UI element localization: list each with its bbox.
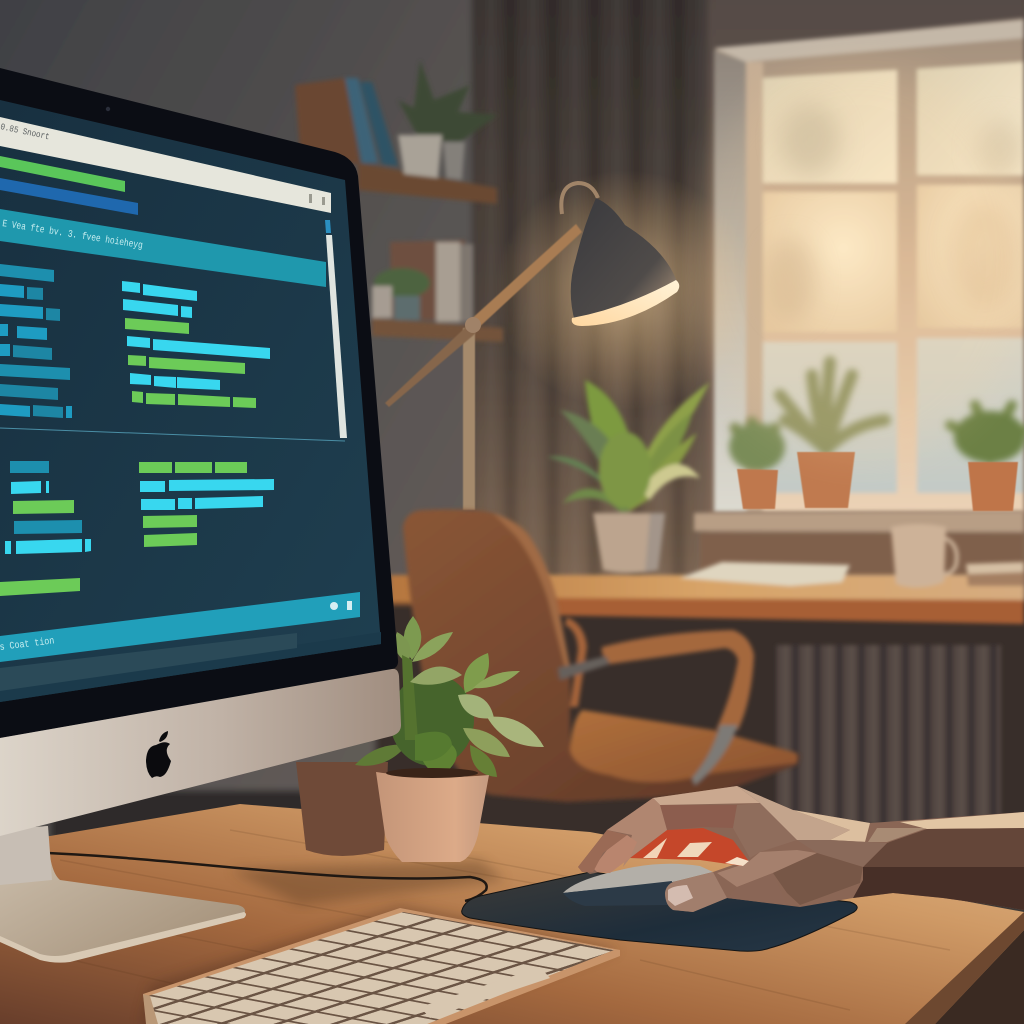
monitor stand bbox=[0, 826, 246, 963]
icon: apple logo bbox=[146, 731, 171, 778]
desk plant pot bbox=[376, 772, 489, 862]
lamp shade bbox=[571, 198, 678, 322]
status band bbox=[0, 592, 360, 662]
window plant pots bbox=[737, 452, 1018, 511]
code block lower right bbox=[139, 462, 274, 547]
heading band bbox=[0, 209, 326, 287]
code block middle bbox=[122, 281, 270, 408]
mug bbox=[891, 524, 946, 588]
radiator bbox=[776, 645, 1001, 825]
code block lower left bbox=[0, 461, 91, 596]
arm and palm base bbox=[578, 786, 1024, 912]
armrest bbox=[602, 630, 754, 730]
mouse pad bbox=[462, 872, 857, 951]
code block left bbox=[0, 264, 72, 418]
back of hand facets bbox=[653, 786, 760, 805]
foreground desk bbox=[0, 804, 1024, 1024]
monitor bbox=[0, 68, 401, 836]
window sill bbox=[694, 511, 1024, 575]
chair back bbox=[403, 509, 800, 802]
monitor chin bbox=[0, 669, 401, 836]
warm light overlay bbox=[690, 60, 1024, 460]
heading band: E Vea fte bv. 3. fvee hoieheyg bbox=[1, 218, 144, 252]
terracotta pot behind plant bbox=[296, 762, 388, 856]
mouse bbox=[563, 864, 713, 906]
floor lamp bbox=[385, 170, 755, 510]
window plants bbox=[729, 362, 1024, 471]
scrollbar bbox=[325, 220, 347, 438]
keyboard bbox=[143, 908, 620, 1024]
plant leaves bbox=[355, 616, 544, 778]
window bbox=[714, 18, 1024, 512]
hand with low-poly wrist bbox=[578, 786, 1024, 912]
monitor cable bbox=[48, 853, 487, 901]
middle plant bbox=[547, 380, 710, 573]
desk plant bbox=[355, 616, 544, 862]
rear armrest bbox=[565, 617, 587, 707]
status band: s Coat tion bbox=[0, 635, 55, 654]
top progress bars bbox=[0, 156, 138, 215]
chair seat bbox=[570, 710, 797, 782]
title bar: 0.85 Snoort bbox=[0, 122, 50, 142]
monitor bezel bbox=[0, 68, 398, 738]
thumb bbox=[665, 872, 727, 912]
rear desk bbox=[390, 524, 1024, 624]
lamp glowing lip bbox=[572, 280, 679, 326]
title bar bbox=[0, 117, 331, 213]
monitor screen bbox=[0, 100, 381, 702]
soft trees seen through the glass bbox=[764, 104, 1024, 322]
palm opening: red glow bbox=[630, 828, 748, 866]
divider line bbox=[0, 428, 345, 441]
footer bar bbox=[0, 633, 297, 691]
office chair bbox=[403, 509, 800, 802]
fingers bbox=[607, 798, 667, 867]
shelves with books and plants bbox=[295, 60, 503, 342]
